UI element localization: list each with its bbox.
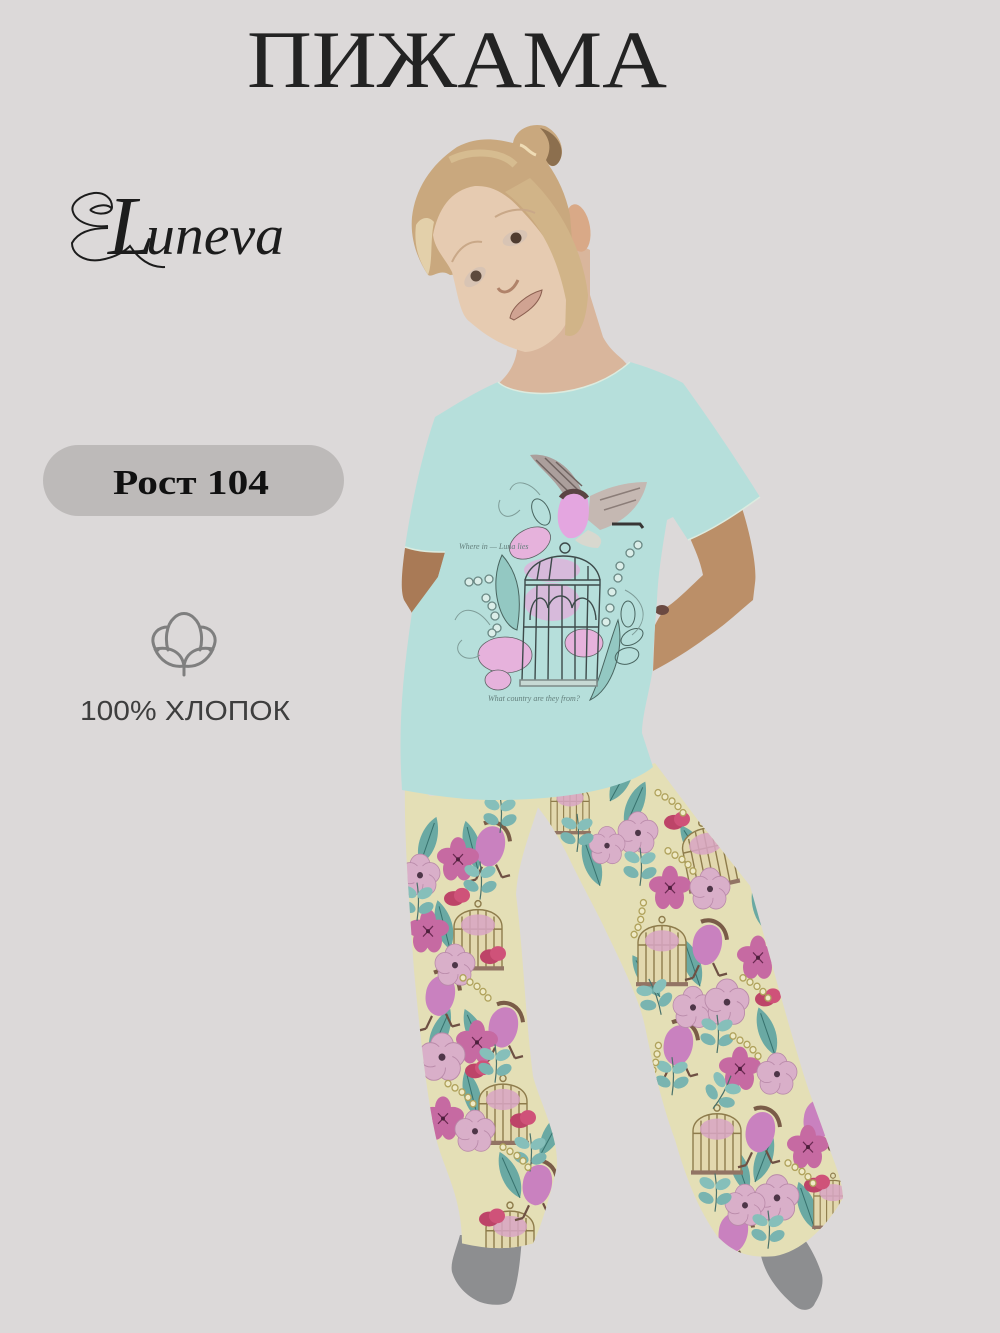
print: bird — [530, 455, 647, 548]
figure: girl in pyjamas — [395, 125, 855, 1310]
neck — [498, 240, 632, 395]
mouth — [510, 290, 542, 320]
height pill — [43, 445, 344, 516]
brand logo: Luneva: L — [107, 180, 155, 273]
print: cage — [520, 543, 600, 686]
arms — [402, 508, 755, 671]
print: leaves — [496, 496, 646, 700]
face — [433, 186, 571, 352]
brand logo: Luneva: uneva — [146, 205, 284, 267]
print: cage blossoms — [524, 558, 580, 621]
socks — [452, 1235, 823, 1310]
pants — [404, 763, 843, 1257]
title: ПИЖАМА — [247, 14, 667, 105]
hair locks — [505, 178, 588, 336]
nose — [498, 280, 518, 292]
shirt print: bird and cage — [455, 455, 647, 703]
print: lily of the valley — [465, 541, 642, 637]
ear — [562, 202, 594, 254]
icon: cotton boll — [153, 614, 215, 675]
eyes and brows — [452, 210, 535, 291]
print: outline clouds — [455, 483, 643, 658]
print: captions: Where in — Luna lies — [459, 542, 528, 551]
print: flowers — [478, 520, 603, 690]
pants print — [399, 753, 854, 1270]
fabric label: 100% ХЛОПОК — [80, 695, 291, 726]
t-shirt — [400, 362, 760, 800]
head — [412, 125, 594, 352]
hair and bun — [412, 125, 574, 276]
bun shadow — [540, 128, 562, 166]
shirt seams — [405, 362, 760, 552]
hair tie — [520, 145, 536, 155]
shirt print: bird and cage: What country are they from? — [488, 694, 580, 703]
height pill: Рост 104 — [113, 463, 269, 502]
brand logo: Luneva — [72, 180, 284, 273]
